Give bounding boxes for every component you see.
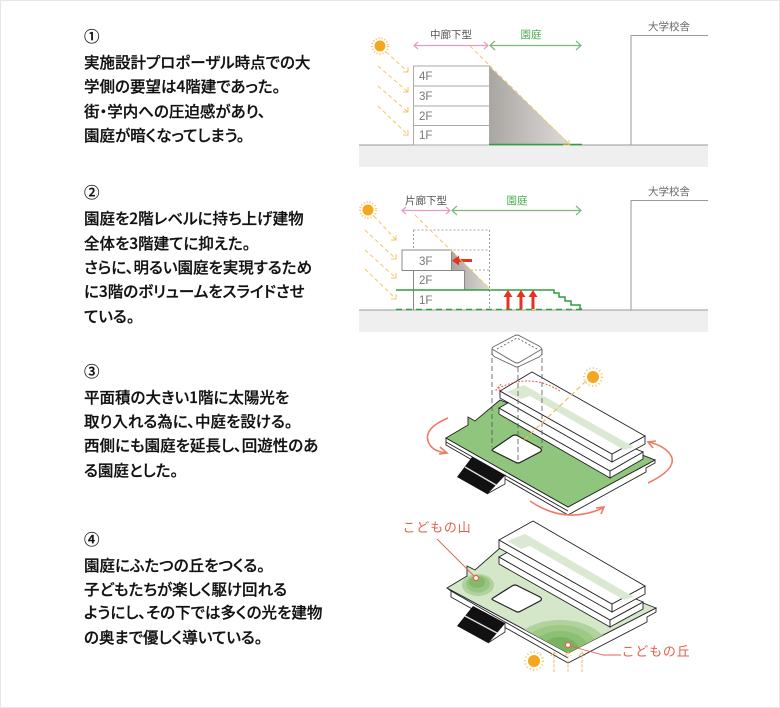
text block 2 [84, 181, 312, 327]
slab edge [446, 438, 655, 515]
dashed former ground [396, 308, 582, 310]
diagrams [359, 21, 708, 672]
label: kodomo no yama: こどもの山 [402, 520, 472, 535]
text block 4: の奥まで優しく導いている。 [84, 626, 262, 648]
slab edge [447, 588, 656, 663]
red arrow right [648, 441, 672, 483]
text block 4: ようにし、その下では多くの光を建物 [84, 601, 322, 623]
text block 2: 全体を3階建てに抑えた。 [84, 232, 250, 254]
sun [360, 202, 376, 218]
shadow [489, 66, 571, 145]
extruded courtyard volume [492, 335, 542, 367]
light green courtyard slab [447, 548, 656, 653]
text block 2: 園庭を2階レベルに持ち上げ建物 [84, 207, 304, 229]
sun rays [378, 46, 570, 145]
sunlight arrows [551, 652, 585, 672]
text block 2: ② [84, 181, 100, 203]
university building [631, 20, 708, 145]
dimension: corridor type: 片廊下型 [405, 194, 447, 207]
floor 3F [402, 250, 452, 270]
floor 3F: 3F [419, 256, 432, 268]
dimension: courtyard [490, 28, 581, 50]
upper floor volume [499, 521, 645, 612]
courtyard green line [489, 144, 582, 146]
text block 1: 園庭が暗くなってしまう。 [84, 124, 244, 146]
label: kodomo no yama [402, 520, 474, 576]
text block 3 [84, 360, 318, 481]
courtyard opening [492, 435, 542, 463]
lower floor volume [499, 399, 643, 478]
text block 4 [84, 528, 322, 648]
red arrow bottom [530, 501, 604, 515]
floor 1F: 1F [419, 295, 432, 307]
university building: 大学校舎 [648, 185, 690, 198]
dimension: corridor type: 中廊下型 [430, 28, 472, 41]
isometric diagram 3 [427, 335, 672, 515]
stairs [457, 606, 505, 643]
dashed red arc arrow [496, 381, 560, 391]
light green strip on roof [506, 385, 634, 450]
text block 1: 学側の要望は4階建であった。 [84, 75, 280, 97]
hill: kodomo no oka [524, 620, 603, 653]
sun [372, 38, 388, 54]
dimension: corridor type [402, 194, 450, 214]
red left arrow [452, 256, 472, 266]
building floors 4F to 1F: 1F [419, 130, 432, 142]
courtyard opening [492, 585, 542, 612]
building floors 4F to 1F [414, 66, 490, 145]
label: kodomo no oka [566, 642, 691, 659]
stairs [457, 457, 505, 494]
ground [359, 145, 708, 167]
text block 1 [84, 25, 310, 146]
building floors 4F to 1F: 4F [419, 71, 432, 83]
sun [525, 652, 543, 670]
upper floor volume [500, 372, 645, 462]
red up arrows [504, 290, 538, 309]
text block 1: ① [84, 25, 100, 47]
text block 1: 実施設計プロポーザル時点での大 [84, 51, 310, 73]
section diagram 1 [359, 20, 708, 167]
light green strip on roof [507, 534, 634, 600]
text block 4: 園庭にふたつの丘をつくる。 [84, 554, 265, 576]
text block 2: に3階のボリュームをスライドさせ [84, 280, 305, 302]
building floors 4F to 1F: 2F [419, 111, 432, 123]
label: kodomo no oka: こどもの丘 [621, 644, 691, 659]
sunlight ray [523, 381, 586, 441]
floor 1F [414, 290, 432, 310]
text block 3: る園庭とした。 [84, 459, 178, 481]
ground [359, 310, 708, 332]
floor 2F: 2F [419, 275, 432, 287]
text block 4: 子どもたちが楽しく駆け回れる [84, 578, 287, 600]
dimension: courtyard [452, 194, 581, 215]
sun [584, 368, 602, 386]
green courtyard slab [446, 400, 655, 507]
text block 2: さらに、明るい園庭を実現するため [84, 256, 312, 278]
dimension: corridor type [414, 28, 488, 49]
university building [631, 185, 708, 310]
text block 3: 取り入れる為に、中庭を設ける。 [84, 410, 293, 432]
floor 2F [414, 270, 464, 290]
hill: kodomo no yama [462, 574, 494, 596]
sun rays [365, 215, 491, 299]
text block 2: ている。 [84, 305, 135, 327]
text block 4: ④ [84, 528, 100, 550]
dashed volume guides [492, 350, 542, 462]
former volume dotted [414, 230, 490, 310]
section diagram 2 [359, 185, 708, 332]
text block 3: ③ [84, 360, 100, 382]
shadow [452, 250, 491, 290]
text block 1: 街・学内への圧迫感があり、 [84, 100, 266, 122]
text block 3: 西側にも園庭を延長し、回遊性のあ [84, 434, 318, 456]
building floors 4F to 1F: 3F [419, 91, 432, 103]
dimension: courtyard: 園庭 [520, 28, 542, 41]
red arrow left [427, 418, 448, 454]
university building: 大学校舎 [648, 20, 690, 33]
isometric diagram 4 [402, 520, 691, 684]
dimension: courtyard: 園庭 [506, 194, 528, 207]
raised courtyard [396, 290, 582, 309]
lower floor volume [499, 548, 643, 627]
text block 3: 平面積の大きい1階に太陽光を [84, 386, 289, 408]
